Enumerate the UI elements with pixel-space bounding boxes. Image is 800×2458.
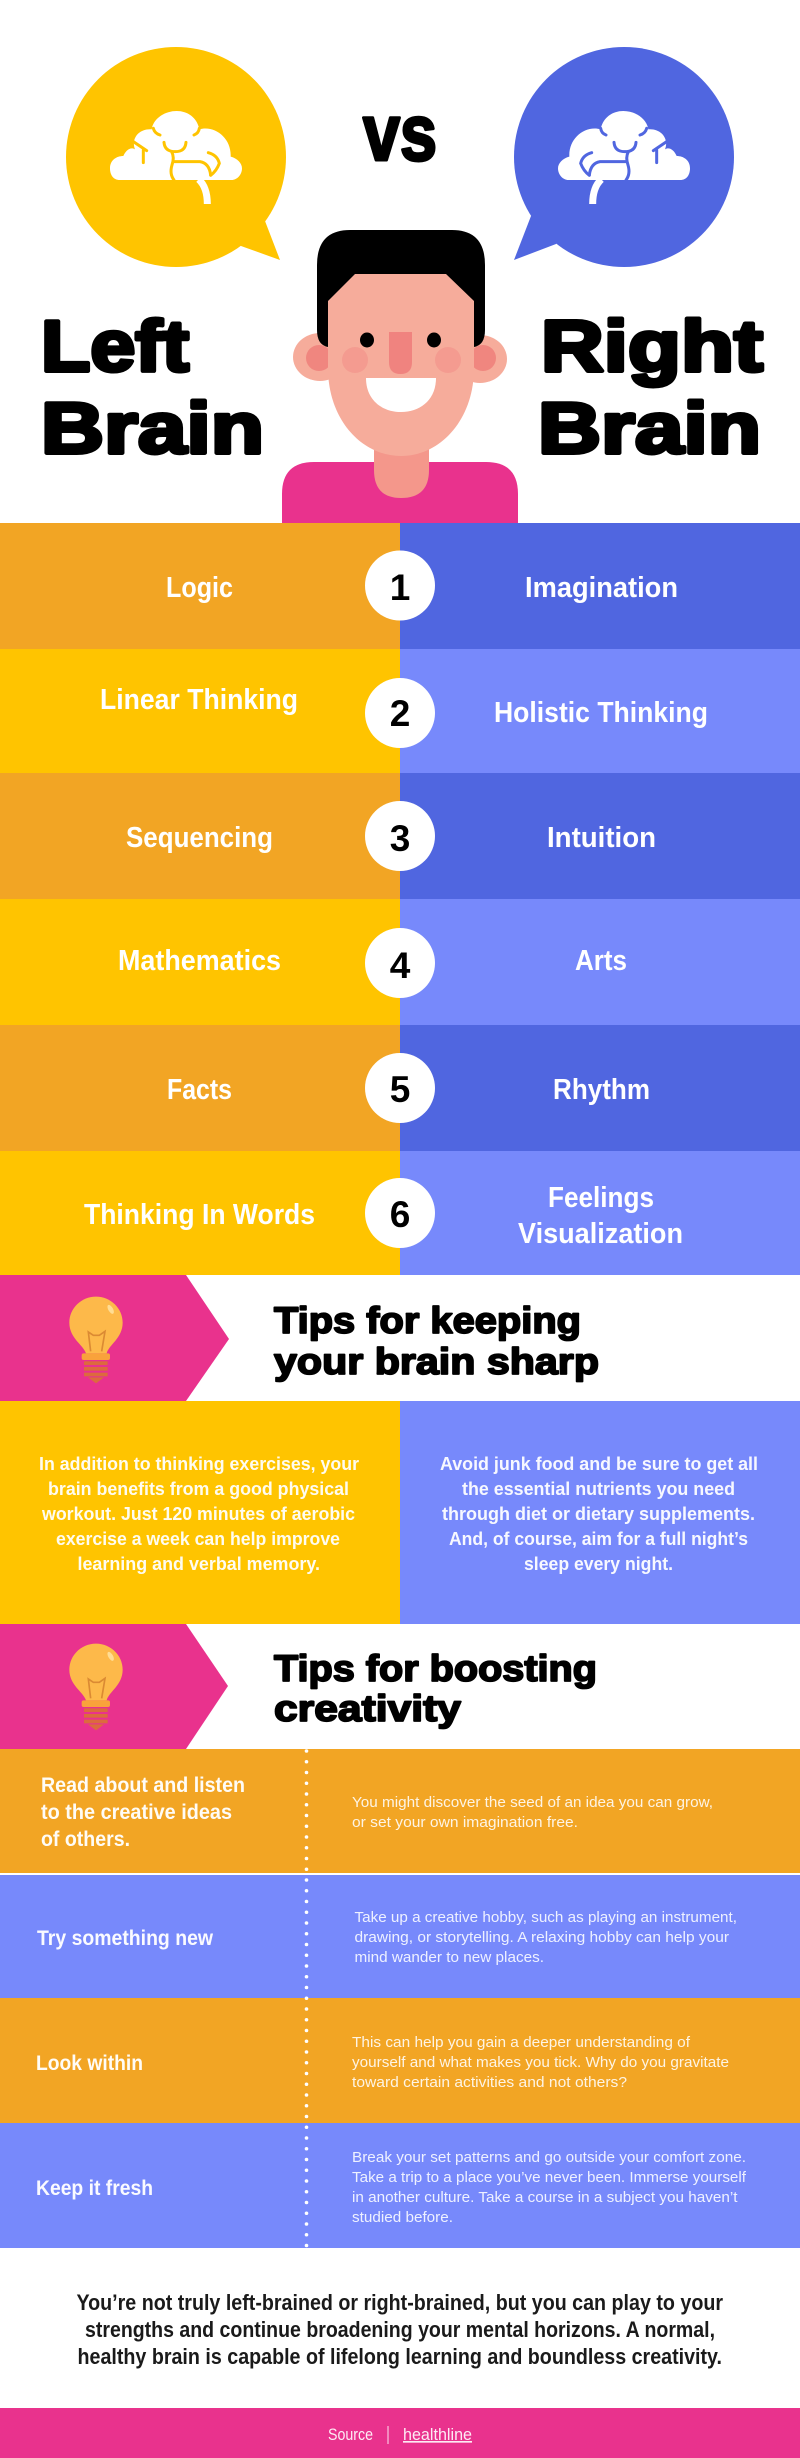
section header: keeping your brain sharp (0, 1275, 599, 1401)
tip row: look within (0, 1998, 800, 2123)
number badges (365, 550, 435, 1248)
tip row: read about (0, 1749, 800, 1873)
number badges: 6 (390, 1194, 410, 1235)
row 3: Sequencing (126, 822, 273, 854)
tip row: read about: or set your own imagination free. (352, 1814, 578, 1831)
closing statement: healthy brain is capable of lifelong learning and boundless creativity. (78, 2344, 722, 2369)
row 4 (0, 899, 800, 1025)
footer source bar: Source (328, 2426, 373, 2444)
panel: nutrition tip (400, 1401, 800, 1624)
character illustration (282, 230, 518, 523)
row 5: Rhythm (553, 1074, 650, 1106)
heading: Left Brain (41, 307, 264, 469)
row 6: Thinking In Words (84, 1199, 315, 1231)
row 4: Arts (575, 945, 627, 977)
heading (274, 1300, 599, 1382)
row 3: Intuition (547, 822, 656, 854)
panel: nutrition tip: sleep every night. (524, 1553, 673, 1574)
closing statement (76, 2290, 723, 2369)
heading: Right Brain (538, 307, 763, 469)
panel: nutrition tip: the essential nutrients you need (462, 1478, 735, 1499)
row 6: Visualization (518, 1218, 683, 1250)
panel: exercise tip (0, 1401, 400, 1624)
tip row: keep it fresh: Keep it fresh (36, 2177, 153, 2200)
panel: nutrition tip: through diet or dietary supplements. (442, 1503, 755, 1524)
dotted divider (305, 1751, 308, 2248)
tip row: keep it fresh: Take a trip to a place you’ve never been. Immerse yourself (352, 2169, 747, 2186)
heading: your brain sharp (274, 1341, 599, 1382)
row 2: Linear Thinking (100, 684, 298, 716)
right speech bubble with brain icon (514, 47, 734, 267)
row 6 (0, 1151, 800, 1275)
tip row: try something new: Take up a creative hobby, such as playing an instrument, (354, 1909, 737, 1926)
tip row: read about: to the creative ideas (41, 1801, 232, 1824)
heading (274, 1648, 597, 1729)
row 4: Mathematics (118, 945, 281, 977)
icon: light bulb (69, 1644, 123, 1730)
row 1 (0, 523, 800, 649)
row 2: Holistic Thinking (494, 697, 708, 729)
heading: vs: vs (363, 88, 437, 177)
row 5: Facts (167, 1074, 232, 1106)
tip row: look within: toward certain activities and not others? (352, 2074, 627, 2091)
tip row: try something new: drawing, or storytelling. A relaxing hobby can help your (354, 1929, 729, 1946)
number badges: 3 (390, 818, 410, 859)
section header: boosting creativity (0, 1624, 597, 1749)
tip row: read about: You might discover the seed of an idea you can grow, (352, 1794, 713, 1811)
row 3 (0, 773, 800, 899)
panel: exercise tip: exercise a week can help improve (56, 1528, 340, 1549)
heading: Left Brain: Brain (41, 389, 264, 469)
tip row: read about: Read about and listen (41, 1774, 245, 1797)
tip row: try something new (0, 1875, 800, 1998)
tip row: keep it fresh: in another culture. Take a course in a subject you haven’t (352, 2189, 738, 2206)
heading: creativity (274, 1688, 461, 1729)
panel: nutrition tip: Avoid junk food and be sure to get all (440, 1453, 758, 1474)
panel: nutrition tip: And, of course, aim for a full night’s (449, 1528, 748, 1549)
tip row: keep it fresh: Break your set patterns and go outside your comfort zone. (352, 2149, 746, 2166)
comparison rows (0, 523, 800, 1275)
row 2 (0, 649, 800, 773)
number badges: 5 (390, 1069, 410, 1110)
number badges: 4 (390, 945, 411, 986)
closing statement: You’re not truly left-brained or right-brained, but you can play to your (76, 2290, 723, 2315)
icon: light bulb (69, 1297, 123, 1383)
heading: Right Brain: Right (541, 307, 763, 387)
tip row: keep it fresh: studied before. (352, 2209, 453, 2226)
icon: left brain (110, 111, 242, 204)
number badges: 2 (390, 693, 410, 734)
heading: Tips for keeping (274, 1300, 581, 1341)
row 1: Imagination (525, 572, 678, 604)
heading: Right Brain: Brain (538, 389, 761, 469)
footer source bar: healthline (403, 2426, 472, 2444)
row 5 (0, 1025, 800, 1151)
left speech bubble with brain icon (66, 47, 286, 267)
panel: exercise tip: In addition to thinking exercises, your (39, 1453, 359, 1474)
closing statement: strengths and continue broadening your mental horizons. A normal, (85, 2317, 715, 2342)
tip row: keep it fresh (0, 2123, 800, 2248)
heading: Tips for boosting (274, 1648, 597, 1689)
panel: exercise tip: brain benefits from a good physical (48, 1478, 349, 1499)
panel: exercise tip: workout. Just 120 minutes of aerobic (41, 1503, 355, 1524)
panel: exercise tip: learning and verbal memory. (78, 1553, 320, 1574)
icon: right brain (558, 111, 690, 204)
tip row: try something new: Try something new (37, 1927, 214, 1950)
tip row: read about: of others. (41, 1828, 130, 1851)
number badges: 1 (390, 567, 410, 608)
heading: Left Brain: Left (41, 307, 189, 387)
row 6: Feelings (548, 1182, 654, 1214)
tip row: try something new: mind wander to new places. (354, 1949, 544, 1966)
footer source bar (0, 2408, 800, 2458)
tip row: look within: yourself and what makes you tick. Why do you gravitate (352, 2054, 729, 2071)
tip row: look within: Look within (36, 2052, 143, 2075)
row 1: Logic (166, 572, 233, 604)
tip row: look within: This can help you gain a deeper understanding of (352, 2034, 691, 2051)
